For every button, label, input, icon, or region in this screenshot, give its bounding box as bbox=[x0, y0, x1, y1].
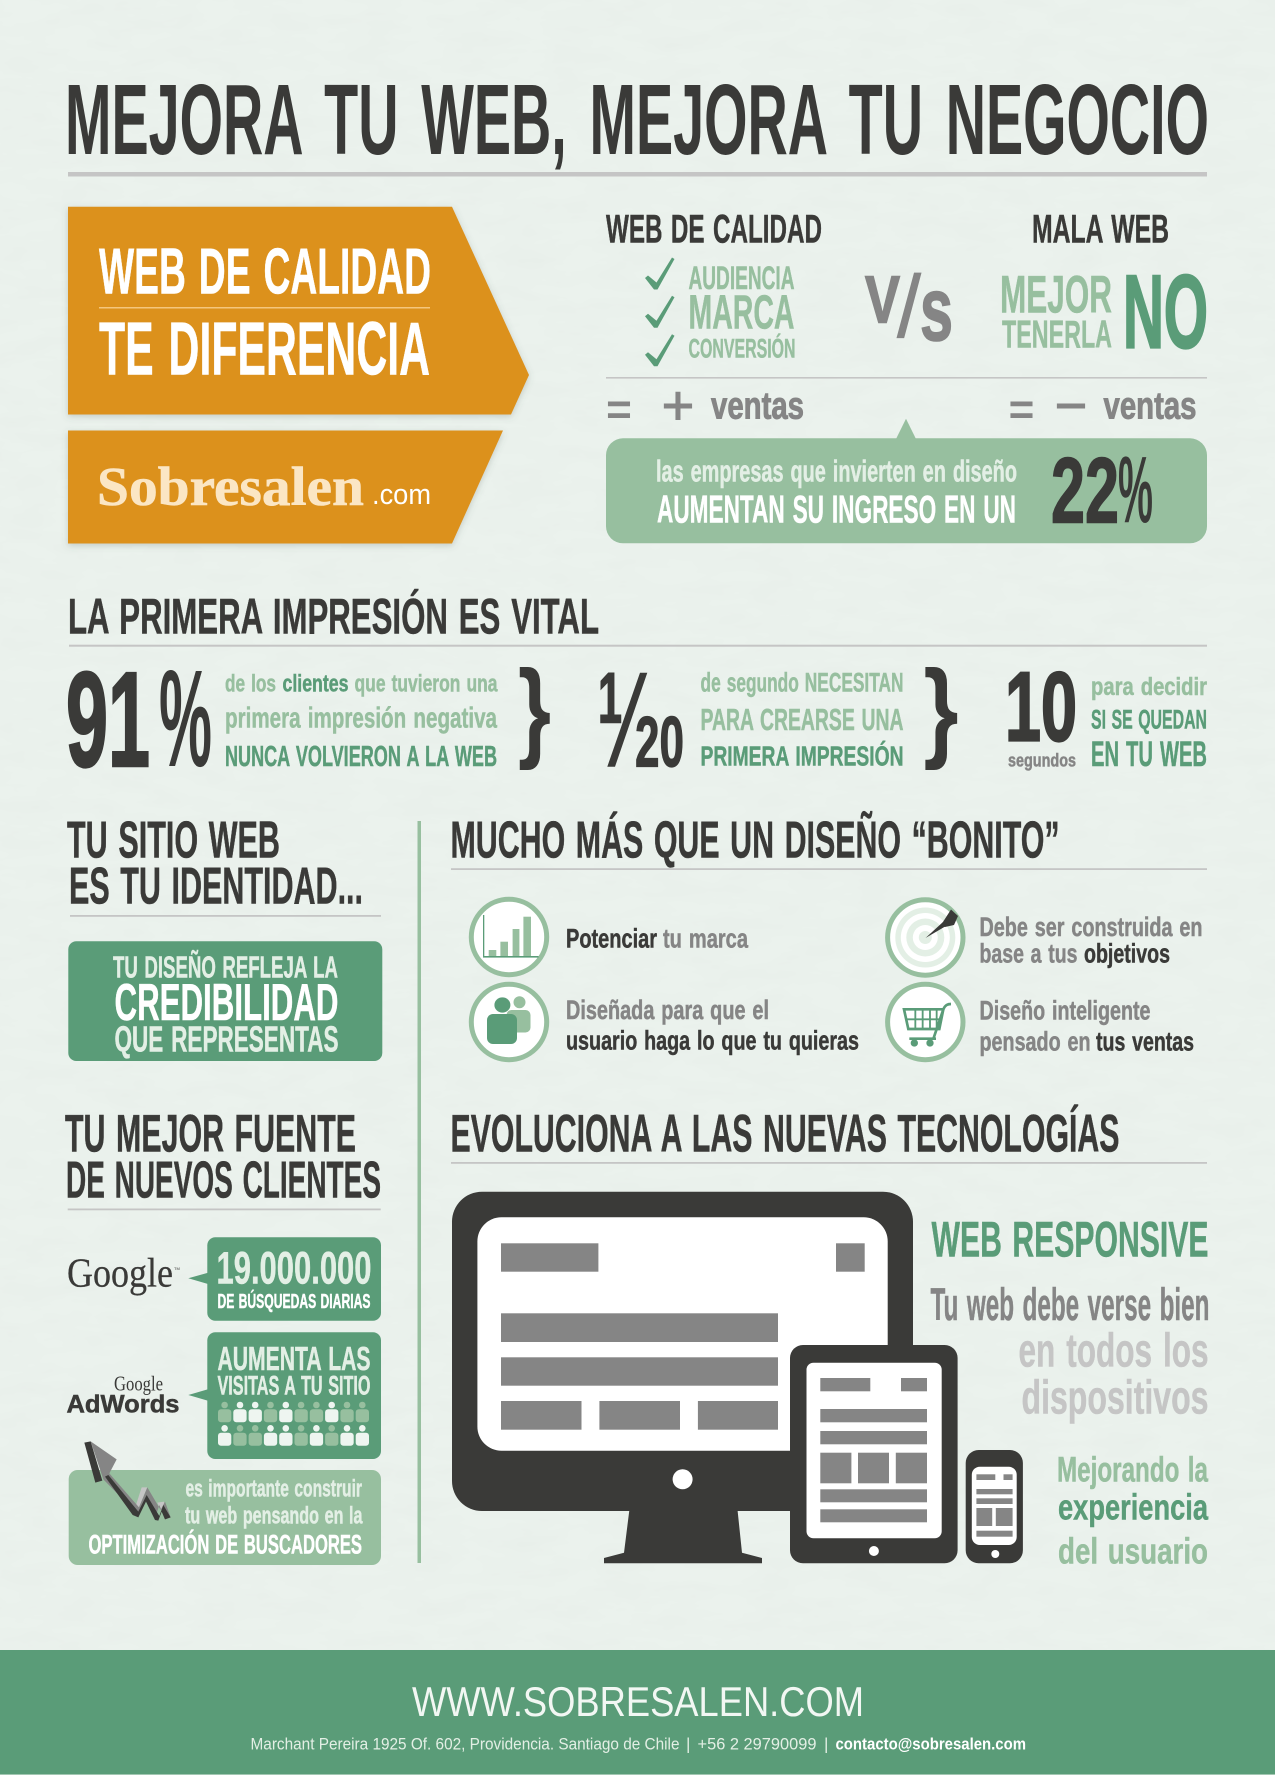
stat: 91 percent: NUNCA VOLVIERON A LA WEB bbox=[225, 741, 497, 773]
stat: 91 percent: % bbox=[159, 642, 212, 796]
stat: 91 percent: clientes bbox=[282, 671, 348, 698]
icon: phone bbox=[966, 1450, 1023, 1563]
text: disenada para: usuario haga lo que tu quieras bbox=[566, 1025, 859, 1055]
list: quality web benefits bbox=[688, 260, 796, 364]
text: debe ser construida: base a tus bbox=[980, 939, 1078, 969]
panel: credibilidad bbox=[68, 941, 382, 1061]
panel: credibilidad: QUE REPRESENTAS bbox=[114, 1019, 338, 1060]
equation: more sales: = bbox=[606, 385, 632, 434]
heading: tu mejor fuente bbox=[65, 1105, 381, 1210]
text: diseno inteligente: tus ventas bbox=[1096, 1027, 1194, 1057]
text: disenada para: Diseñada para que el bbox=[566, 995, 769, 1025]
bad web statement: TENERLA bbox=[1002, 314, 1112, 357]
panel: orange logo banner: .com bbox=[372, 479, 431, 511]
stat: one twentieth: 1 bbox=[598, 660, 622, 739]
logo: google: Google bbox=[67, 1250, 173, 1296]
text: potenciar tu marca bbox=[566, 923, 749, 953]
heading: tu sitio web bbox=[67, 810, 381, 917]
versus mark: V bbox=[865, 262, 900, 337]
stat: one twentieth: 20 bbox=[635, 704, 684, 783]
panel: seo optimisation: tu web pensando en la bbox=[185, 1502, 363, 1529]
panel: orange arrow banner: WEB DE CALIDAD bbox=[99, 234, 431, 308]
text: diseno inteligente: pensado en bbox=[980, 1027, 1090, 1057]
footer: | bbox=[824, 1734, 828, 1753]
list: quality web benefits: CONVERSIÓN bbox=[688, 333, 796, 364]
logo: google adwords bbox=[66, 1372, 180, 1418]
text: user experience: Mejorando la bbox=[1057, 1451, 1208, 1490]
versus mark: / bbox=[897, 257, 922, 356]
divider: vertical column line bbox=[418, 821, 421, 1563]
stat: ten seconds: segundos bbox=[1008, 751, 1076, 771]
footer: | bbox=[686, 1734, 690, 1753]
footer: Marchant Pereira 1925 Of. 602, Providencia. Santiago de Chile bbox=[250, 1734, 680, 1753]
bad web statement bbox=[1000, 254, 1208, 370]
equation: fewer sales: ventas bbox=[1104, 385, 1196, 427]
panel: seo optimisation bbox=[69, 1470, 381, 1565]
equation: fewer sales: − bbox=[1055, 374, 1087, 436]
icon: desktop monitor bbox=[452, 1192, 913, 1563]
callout: 22 percent: % bbox=[1118, 437, 1153, 543]
list: quality web benefits: MARCA bbox=[688, 286, 794, 340]
equation: more sales: + bbox=[662, 374, 694, 436]
logo: google adwords: AdWords bbox=[66, 1390, 180, 1418]
footer bbox=[0, 1650, 1275, 1774]
footer: contacto@sobresalen.com bbox=[836, 1734, 1026, 1753]
panel: seo optimisation: es importante construir bbox=[186, 1476, 362, 1503]
equation: more sales bbox=[606, 374, 804, 436]
stat: ten seconds: 10 bbox=[1005, 652, 1077, 762]
text: user experience bbox=[1057, 1451, 1209, 1571]
equation: more sales: ventas bbox=[711, 385, 804, 427]
bad web statement: MEJOR bbox=[1000, 265, 1112, 324]
callout: 22 percent bbox=[606, 419, 1207, 543]
text: user experience: experiencia bbox=[1058, 1486, 1209, 1527]
callout: daily searches: DE BÚSQUEDAS DIARIAS bbox=[218, 1289, 370, 1313]
icon: tablet bbox=[790, 1345, 958, 1563]
icon: users bbox=[471, 984, 547, 1060]
text: debe ser construida: objetivos bbox=[1084, 939, 1170, 969]
versus mark bbox=[865, 257, 953, 360]
stat: one twentieth: PRIMERA IMPRESIÓN bbox=[700, 741, 904, 772]
heading: web de calidad: WEB DE CALIDAD bbox=[606, 208, 822, 252]
stat: 91 percent bbox=[66, 642, 498, 796]
heading: tu mejor fuente: DE NUEVOS CLIENTES bbox=[66, 1150, 381, 1208]
panel: seo optimisation: OPTIMIZACIÓN DE BUSCADORES bbox=[88, 1529, 362, 1559]
heading: tu sitio web: TU SITIO WEB bbox=[67, 810, 280, 868]
stat: one twentieth bbox=[598, 660, 904, 783]
equation: fewer sales bbox=[1009, 374, 1196, 436]
icon: shopping cart bbox=[888, 984, 963, 1060]
callout: 22 percent: AUMENTAN SU INGRESO EN UN bbox=[657, 488, 1016, 531]
stat: 91 percent: primera impresión negativa bbox=[225, 702, 498, 734]
panel: orange arrow banner: TE DIFERENCIA bbox=[99, 306, 430, 390]
equation: fewer sales: = bbox=[1009, 385, 1034, 434]
stat: 91 percent: de los bbox=[225, 671, 276, 698]
stat: ten seconds bbox=[1005, 652, 1207, 774]
icon: rising arrow bbox=[84, 1441, 171, 1521]
callout: daily searches: 19.000.000 bbox=[216, 1242, 372, 1293]
text: diseno inteligente bbox=[980, 995, 1194, 1057]
text: potenciar tu marca: tu marca bbox=[663, 923, 749, 953]
panel: credibilidad: CREDIBILIDAD bbox=[114, 974, 338, 1032]
callout: more visits: VISITAS A TU SITIO bbox=[218, 1370, 370, 1400]
heading: mala web: MALA WEB bbox=[1032, 208, 1169, 252]
stat: 91 percent: que tuvieron una bbox=[354, 671, 498, 698]
versus mark: s bbox=[920, 260, 953, 360]
text: potenciar tu marca: Potenciar bbox=[566, 923, 657, 953]
logo: google adwords: Google bbox=[114, 1372, 163, 1396]
heading: tu sitio web: ES TU IDENTIDAD... bbox=[69, 856, 363, 914]
stat: one twentieth: de segundo NECESITAN bbox=[700, 668, 904, 698]
text: disenada para bbox=[566, 995, 859, 1055]
icon: check marks bbox=[645, 258, 674, 366]
logo: google: TM bbox=[174, 1266, 180, 1271]
text: responsive message bbox=[930, 1279, 1210, 1423]
brace 2: } bbox=[924, 648, 958, 771]
text: debe ser construida: Debe ser construida en bbox=[980, 912, 1202, 942]
footer: +56 2 29790099 bbox=[698, 1734, 816, 1753]
bad web statement: NO bbox=[1123, 254, 1208, 370]
callout: more visits bbox=[188, 1332, 381, 1459]
heading: tu mejor fuente: TU MEJOR FUENTE bbox=[65, 1105, 356, 1164]
text: debe ser construida bbox=[980, 912, 1202, 969]
panel: orange logo banner: Sobresalen bbox=[97, 456, 364, 517]
stat: 91 percent: 91 bbox=[66, 644, 150, 795]
panel: orange logo banner bbox=[68, 430, 503, 544]
icon: target and dart bbox=[888, 900, 963, 975]
callout: 22 percent: 22 bbox=[1051, 438, 1119, 542]
heading: la primera impresion: LA PRIMERA IMPRESIÓN ES VITAL bbox=[68, 588, 599, 644]
panel: orange arrow banner bbox=[68, 207, 529, 414]
stat: one twentieth: PARA CREARSE UNA bbox=[700, 703, 904, 737]
callout: more visits: AUMENTA LAS bbox=[218, 1341, 370, 1378]
icon: bar chart bbox=[471, 899, 547, 975]
text: diseno inteligente: Diseño inteligente bbox=[980, 995, 1150, 1025]
text: user experience: del usuario bbox=[1058, 1530, 1208, 1571]
callout: daily searches bbox=[188, 1237, 381, 1321]
list: quality web benefits: AUDIENCIA bbox=[688, 260, 794, 296]
panel: credibilidad: TU DISEÑO REFLEJA LA bbox=[113, 949, 338, 984]
stat: ten seconds: para decidir bbox=[1091, 673, 1207, 701]
brace 1: } bbox=[518, 648, 551, 771]
footer: WWW.SOBRESALEN.COM bbox=[412, 1678, 864, 1725]
callout: 22 percent: las empresas que invierten en diseño bbox=[656, 454, 1017, 489]
